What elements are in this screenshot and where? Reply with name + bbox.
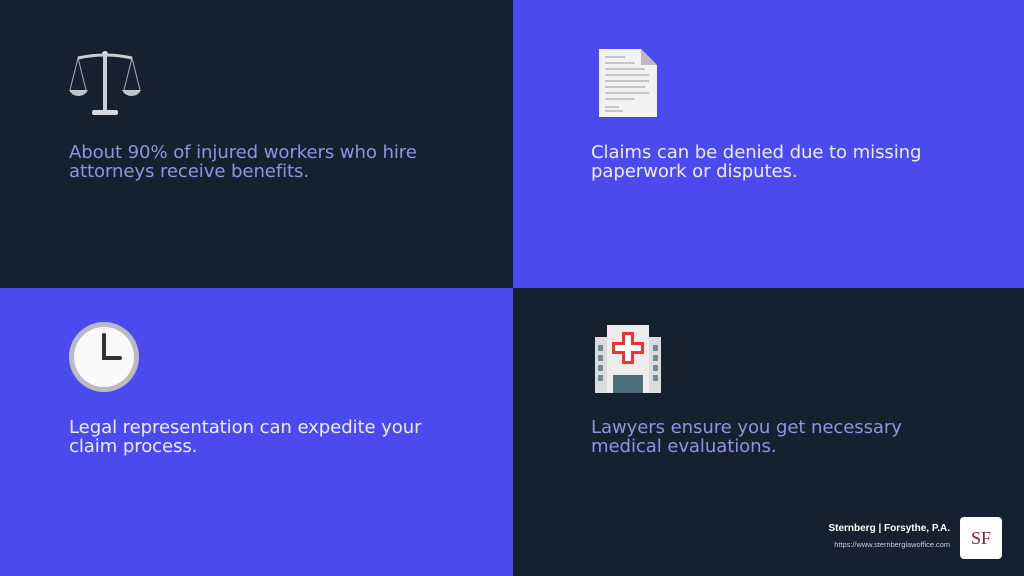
icon: clock: [69, 322, 139, 392]
text: medical: [591, 417, 902, 457]
text: benefits: attorneys receive benefits.: [69, 161, 309, 182]
text: benefits: About 90% of injured workers who hire: [69, 142, 417, 163]
logo: [960, 517, 1002, 559]
icon: scales: [69, 51, 141, 115]
logo: SF: [971, 528, 991, 548]
panel: paperwork: [513, 0, 1024, 288]
text: paperwork: Claims can be denied due to missing: [591, 142, 921, 163]
panel: medical: [513, 288, 1024, 576]
footer: brand: [828, 517, 1002, 559]
text: paperwork: paperwork or disputes.: [591, 161, 798, 182]
text: paperwork: [591, 142, 921, 182]
text: medical: Lawyers ensure you get necessary: [591, 417, 902, 438]
text: expedite: claim process.: [69, 436, 197, 457]
icon: hospital: [595, 325, 661, 393]
panel: benefits: [0, 0, 513, 288]
panel: expedite: [0, 288, 513, 576]
text: expedite: [69, 417, 422, 457]
brand name: Sternberg | Forsythe, P.A.: [828, 523, 950, 534]
text: expedite: Legal representation can expedite your: [69, 417, 421, 438]
icon: document: [599, 49, 657, 117]
text: benefits: [69, 142, 417, 182]
text: medical: medical evaluations.: [591, 436, 776, 457]
brand url: https://www.sternberglawoffice.com: [834, 540, 950, 549]
